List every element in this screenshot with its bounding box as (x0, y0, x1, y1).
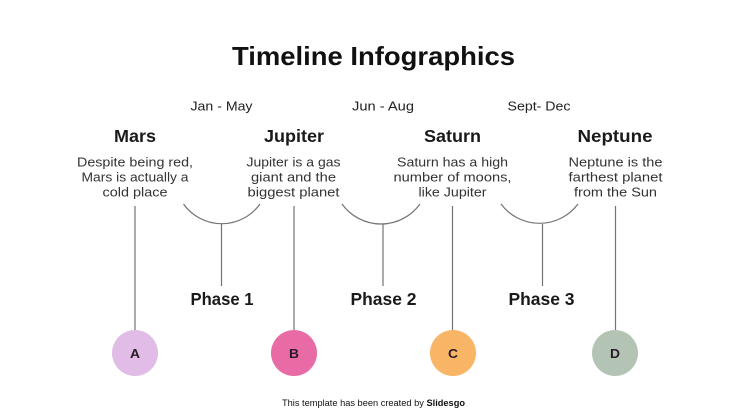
connector line: Mars (134, 206, 136, 331)
text block: Mars description: cold place (102, 184, 168, 200)
text block: Saturn description: like Jupiter (418, 184, 487, 200)
label: Phase 3: Phase 3 (508, 289, 575, 309)
text block: Saturn description: Saturn has a high (397, 154, 508, 170)
text block: Mars description: Despite being red, (77, 154, 193, 170)
marker: B: B (289, 346, 299, 361)
phase 2 connector (342, 204, 420, 309)
text block: Jupiter description: Jupiter is a gas (246, 154, 341, 170)
panel: Saturn (394, 126, 512, 376)
panel: Jupiter (246, 126, 341, 376)
text block: Jupiter description: biggest planet (248, 184, 340, 200)
phase 1 connector (184, 204, 260, 309)
connector line: Saturn (452, 206, 454, 331)
marker: B (271, 330, 317, 376)
phase 3 connector (501, 204, 578, 309)
connector line: Jupiter (293, 206, 295, 331)
title: Timeline Infographics (232, 41, 515, 71)
panel: Mars (77, 126, 193, 376)
heading: Saturn: Saturn (424, 126, 481, 146)
text block: Saturn description: number of moons, (394, 170, 512, 184)
stem: phase 2 (382, 224, 384, 286)
text block: Jupiter description: giant and the (251, 170, 336, 184)
date: Sept- Dec: Sept- Dec (508, 98, 571, 114)
date: Jan - May: Jan - May (190, 98, 253, 114)
arc: phase 1 (184, 204, 260, 224)
label: Phase 2: Phase 2 (350, 289, 417, 309)
marker: D: D (610, 346, 620, 361)
stem: phase 3 (542, 224, 544, 286)
arc: phase 2 (342, 204, 420, 224)
marker: C (430, 330, 476, 376)
heading: Neptune: Neptune (578, 126, 653, 146)
marker: C: C (448, 346, 459, 361)
text block: Mars description: Mars is actually a (82, 170, 189, 184)
arc: phase 3 (501, 204, 578, 223)
marker: D (592, 330, 638, 376)
marker: A (112, 330, 158, 376)
connector line: Neptune (614, 206, 616, 331)
date: Jun - Aug: Jun - Aug (352, 98, 414, 114)
panel: Neptune (568, 126, 663, 376)
heading: Mars: Mars (114, 126, 156, 146)
text block: Neptune description: from the Sun (574, 184, 657, 200)
text block: Neptune description: farthest planet (568, 170, 663, 184)
footer credit: This template has been created by Slidesgo (282, 398, 466, 408)
text block: Neptune description: Neptune is the (568, 154, 662, 170)
label: Phase 1: Phase 1 (190, 289, 254, 309)
stem: phase 1 (220, 224, 222, 286)
heading: Jupiter: Jupiter (264, 126, 324, 146)
marker: A: A (130, 346, 141, 361)
